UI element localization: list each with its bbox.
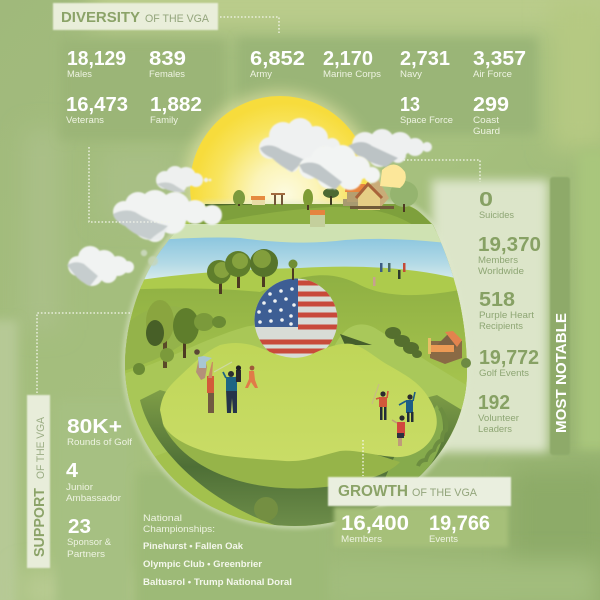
stats: support: Sponsor & [67,537,112,548]
stats: most notable: Worldwide [478,266,524,277]
heading: support of the VGA: SUPPORT [32,488,48,557]
heading: growth of the VGA [328,477,511,506]
icon: landscape [125,204,467,526]
text: national championships [143,513,292,588]
stats: support: 80K+ [67,416,122,438]
stats: military branches: 299 [473,94,509,116]
icon: sun [184,91,376,283]
stats: support: 23 [68,516,91,538]
stats: diversity [66,48,202,126]
dotted connector: globe to support [37,313,130,393]
illustration: golf globe [67,91,500,540]
stats: support: Junior [66,482,93,493]
icon: people right group [372,384,415,446]
stats: most notable: Recipients [479,321,523,332]
panel: military background [238,38,537,134]
text: national championships: Pinehurst • Fallen Oak [143,541,244,552]
dotted connector: globe to most notable [400,160,480,182]
icon: main farmhouse [343,178,394,210]
icon: cloud small lower-left [67,246,158,286]
text: national championships: Championships: [143,524,215,535]
stats: military branches: Air Force [473,69,512,80]
fairway [160,343,437,461]
stats: most notable: Suicides [479,210,514,221]
heading: support of the VGA: OF THE VGA [35,416,47,479]
stats: growth: 16,400 [341,512,409,535]
stats: growth: Members [341,534,382,545]
stats: diversity: 18,129 [67,48,126,70]
icon: far golfers [373,263,406,286]
icon: right bushes [385,327,422,358]
stats: military branches: Army [250,69,272,80]
halo: globe edge [125,204,467,526]
stats: most notable: Purple Heart [479,310,534,321]
panel: growth stats background [334,507,508,547]
icon: horizon houses [233,188,339,227]
stats: diversity: Family [150,115,178,126]
stats: military branches: Space Force [400,115,453,126]
icon: cloud top centre [259,118,340,172]
icon: right farmhouse [428,331,471,368]
heading: diversity of the VGA: DIVERSITY [61,10,140,26]
stats: most notable: Volunteer [478,413,519,424]
icon: right tree on horizon [380,164,418,212]
stats: support [66,416,132,560]
stats: growth: Events [429,534,458,545]
heading: growth of the VGA: GROWTH [338,483,408,500]
stats: support: Partners [67,549,105,560]
heading: diversity of the VGA [53,3,218,30]
heading: diversity of the VGA: OF THE VGA [145,13,210,25]
text: national championships: National [143,513,182,524]
stats: most notable: 518 [479,289,515,311]
heading: support of the VGA [27,395,50,568]
stats: military branches: 13 [400,94,420,116]
stats: most notable: 0 [479,189,493,211]
stats: most notable: Golf Events [479,368,529,379]
icon: people left group [194,349,258,413]
stats: diversity: Males [67,69,92,80]
stats: military branches: 3,357 [473,48,526,70]
dotted connector: diversity to globe [89,147,170,222]
stats: military branches [250,48,526,137]
icon: trees lower-left [133,300,226,375]
icon: golf ball with US flag [254,278,340,362]
dotted connector: diversity to military [220,17,279,33]
icon: trees mid-left [207,249,298,294]
stats: most notable [478,189,541,435]
icon: cloud centre [299,145,380,190]
icon: cloud small top-left [156,166,211,193]
stats: military branches: 2,731 [400,48,450,70]
stats: military branches: 2,170 [323,48,373,70]
stats: most notable: 192 [478,392,510,414]
stats: military branches: Marine Corps [323,69,381,80]
panel: championships background [137,472,327,600]
icon: cloud big left [113,190,222,242]
stats: growth [341,512,490,545]
panel: most notable background [432,180,548,452]
stats: most notable: Leaders [478,424,512,435]
stats: most notable: 19,772 [479,347,539,369]
stats: most notable: 19,370 [478,234,541,256]
panel: diversity background [60,40,224,140]
text: national championships: Olympic Club • Greenbrier [143,559,262,570]
heading: growth of the VGA: OF THE VGA [412,487,478,499]
stats: military branches: 6,852 [250,48,305,70]
stats: support: Ambassador [66,493,121,504]
stats: diversity: 16,473 [66,94,128,116]
heading: most notable [550,177,570,455]
stats: most notable: Members [478,255,518,266]
stats: diversity: 839 [149,48,186,70]
stats: diversity: 1,882 [150,94,202,116]
stats: military branches: Guard [473,126,500,137]
stats: diversity: Veterans [66,115,104,126]
stats: military branches: Coast [473,115,499,126]
stats: military branches: Navy [400,69,422,80]
text: national championships: Baltusrol • Trump National Doral [143,577,292,588]
icon: cloud right [348,129,432,167]
stats: growth: 19,766 [429,512,490,535]
dotted connector: globe to growth [362,440,364,476]
stats: diversity: Females [149,69,185,80]
stats: support: Rounds of Golf [67,437,132,448]
heading: most notable: MOST NOTABLE [553,313,570,433]
stats: support: 4 [66,460,79,482]
panel: support background [56,400,130,600]
